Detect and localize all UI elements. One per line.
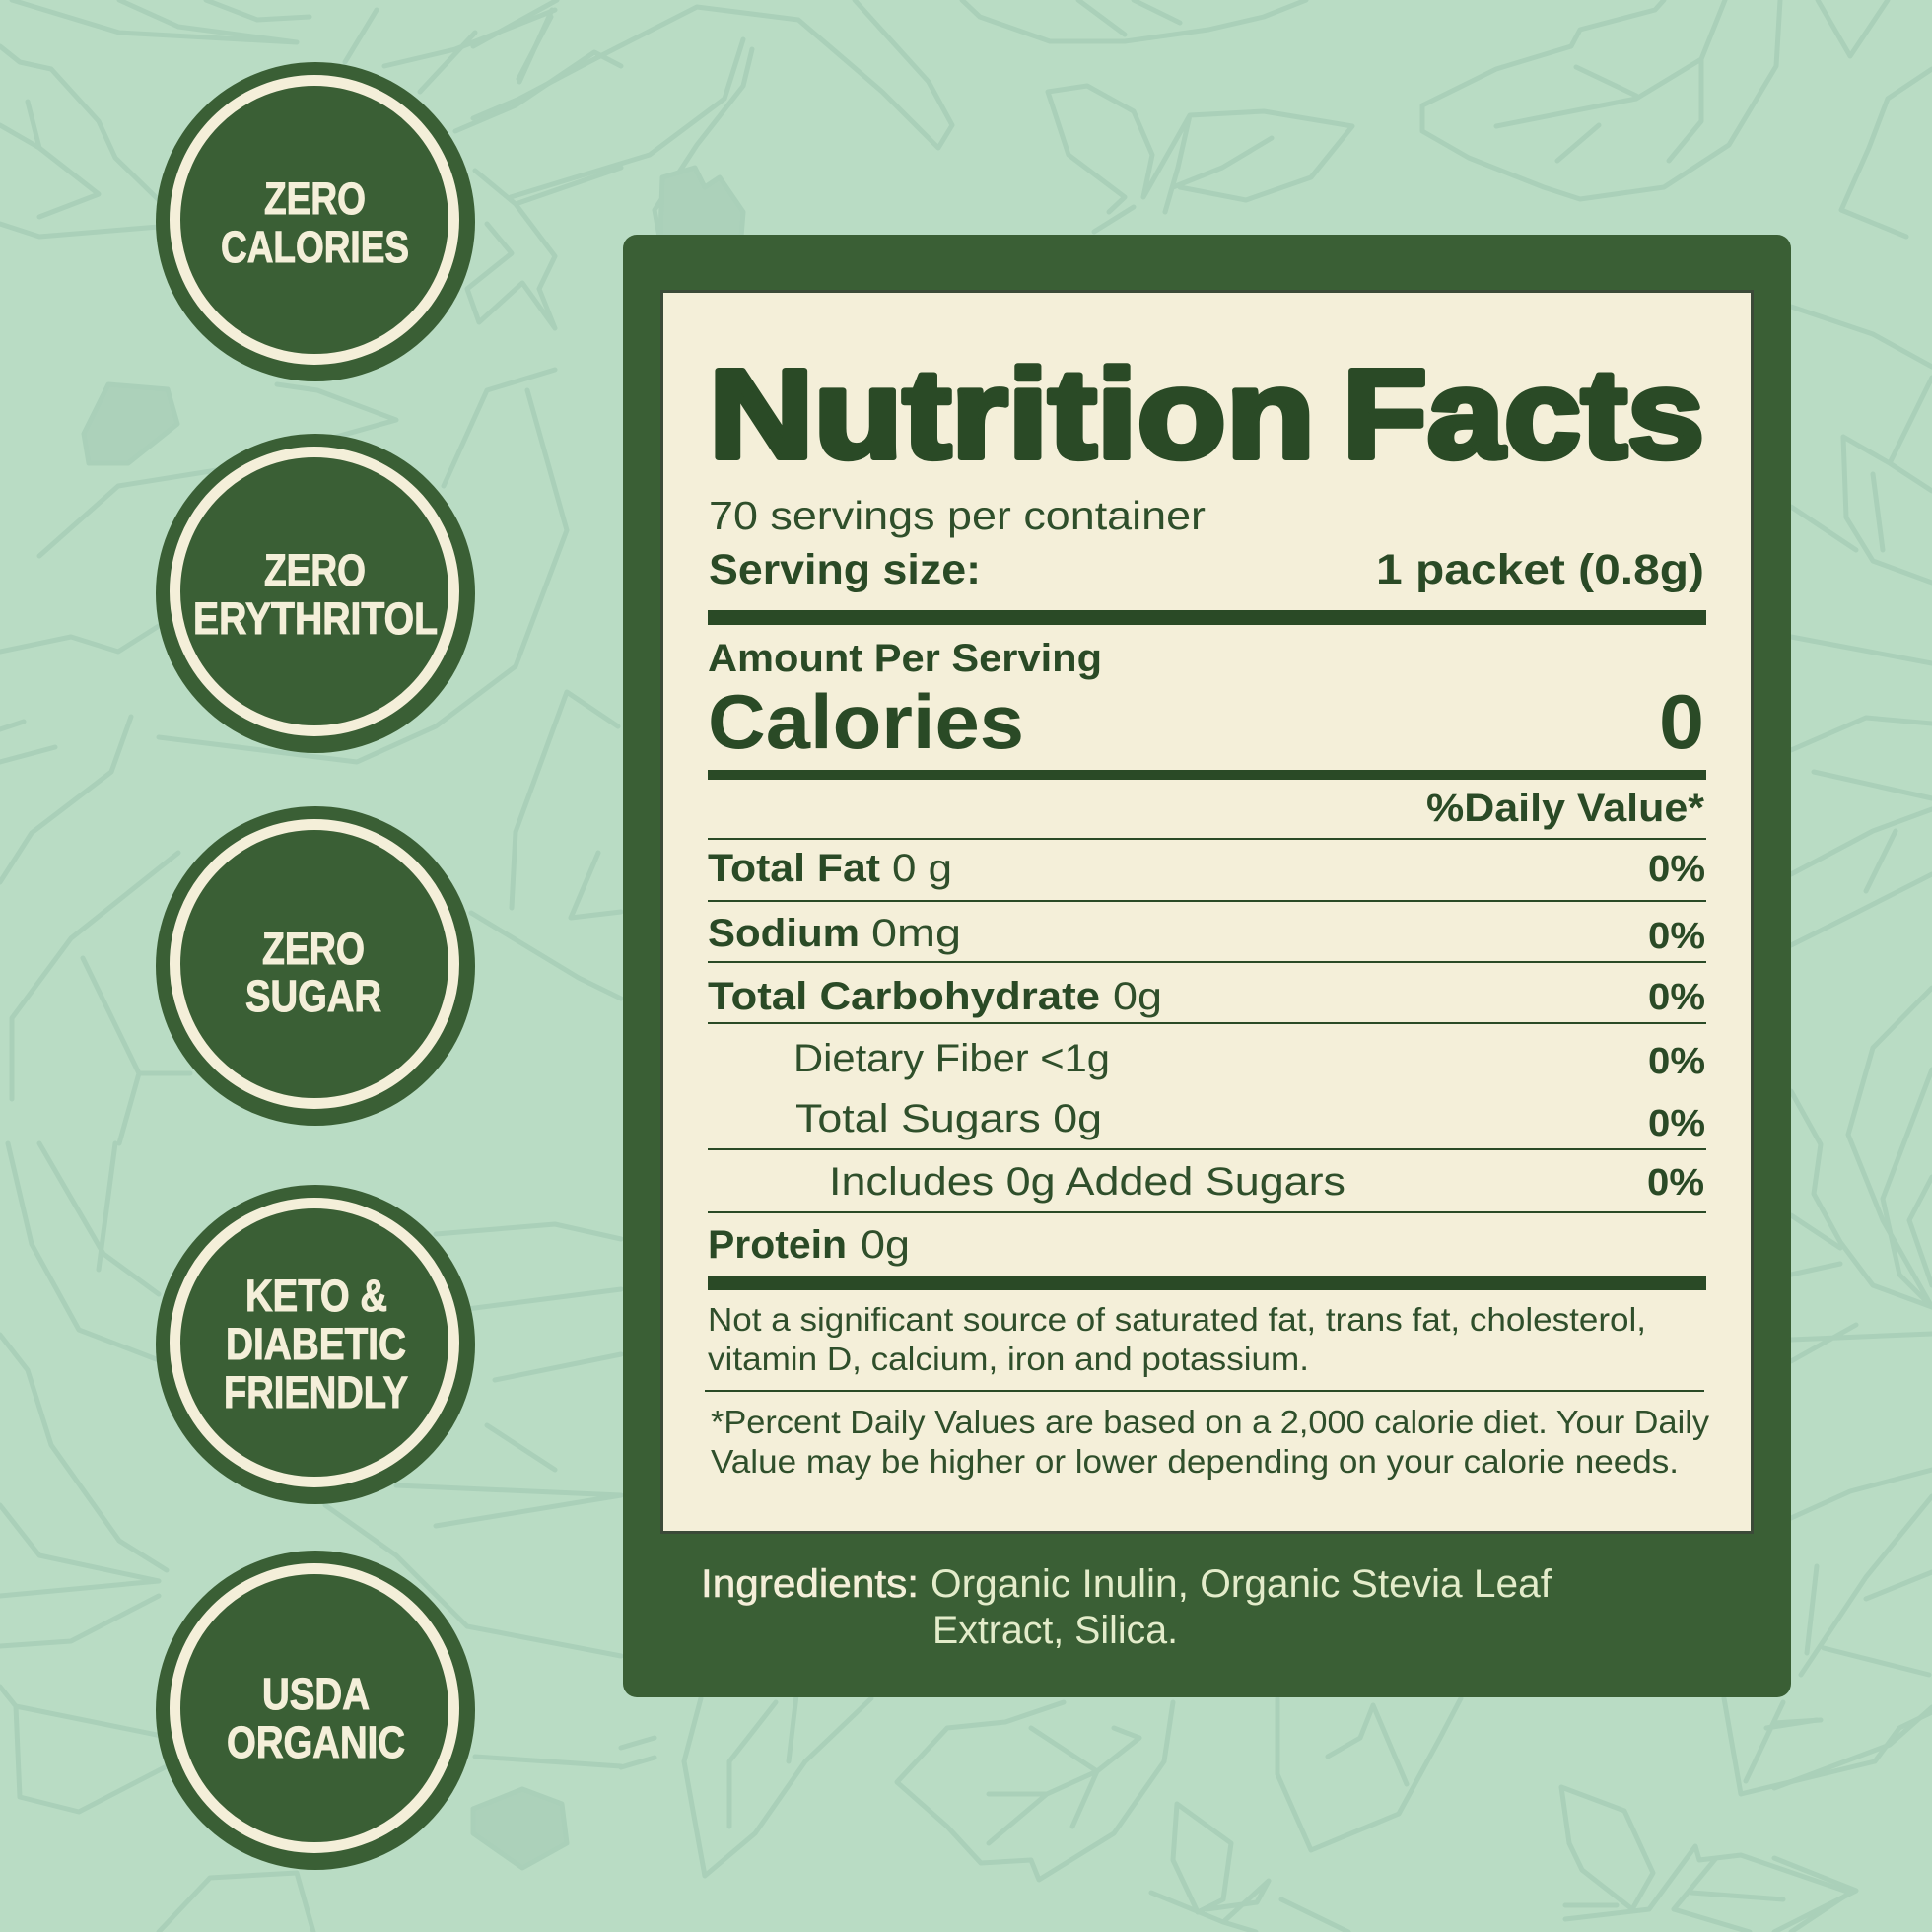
badge: zero sugar: SUGAR: [245, 971, 381, 1021]
row: total fat: 0 g: [892, 847, 952, 890]
title: Facts: [1343, 344, 1704, 485]
row: total sugars: [795, 1097, 1705, 1144]
badge: usda organic: USDA: [262, 1669, 370, 1719]
badge: zero calories: ZERO: [264, 173, 366, 224]
badge: keto and diabetic friendly: KETO &: [245, 1271, 387, 1321]
ingredients: [701, 1562, 1552, 1652]
row: dietary fiber: 0%: [1648, 1041, 1705, 1082]
row: total fat: 0%: [1648, 849, 1705, 890]
row: total sugars: Total Sugars 0g: [795, 1097, 1102, 1140]
badge: usda organic: [156, 1551, 475, 1870]
badge: keto and diabetic friendly: FRIENDLY: [224, 1367, 408, 1417]
badge: keto and diabetic friendly: [156, 1185, 475, 1504]
row: total fat: Total Fat: [708, 847, 880, 890]
row: total carbohydrate: Total Carbohydrate: [708, 975, 1100, 1018]
calories: 0: [1659, 678, 1704, 765]
row: total carbohydrate: [708, 975, 1705, 1018]
label card: [662, 292, 1753, 1532]
row: added sugars: [829, 1160, 1704, 1204]
note: not a significant source: vitamin D, calcium, iron and potassium.: [708, 1341, 1309, 1377]
badge: zero calories: [156, 62, 475, 381]
row: total fat: [708, 847, 1705, 890]
row: protein: Protein: [708, 1223, 847, 1267]
serving size: 1 packet (0.8g): [1376, 546, 1704, 593]
calories: Calories: [708, 678, 1024, 765]
ingredients: Organic Inulin, Organic Stevia Leaf: [931, 1562, 1552, 1606]
calories: [708, 678, 1704, 765]
serving size: Serving size:: [709, 546, 981, 593]
row: total sugars: 0%: [1648, 1103, 1705, 1144]
servings per container: 70 servings per container: [709, 493, 1206, 538]
note: not a significant source: Not a significant source of saturated fat, trans fat, cholesterol,: [708, 1301, 1646, 1338]
note: percent daily values: Value may be higher or lower depending on your calorie needs.: [711, 1443, 1679, 1480]
badge: keto and diabetic friendly: DIABETIC: [226, 1319, 406, 1369]
badge: zero calories: CALORIES: [221, 222, 409, 272]
row: sodium: Sodium: [708, 912, 860, 955]
title: [709, 344, 1704, 485]
note: percent daily values: *Percent Daily Values are based on a 2,000 calorie diet. Your Daily: [711, 1404, 1710, 1440]
badge: zero erythritol: ERYTHRITOL: [193, 593, 438, 644]
row: total carbohydrate: 0g: [1113, 975, 1162, 1018]
row: sodium: 0%: [1648, 916, 1705, 957]
ingredients: Ingredients:: [701, 1562, 919, 1606]
panel: nutrition label: [623, 235, 1791, 1697]
serving size: [709, 546, 1704, 593]
row: protein: 0g: [861, 1223, 910, 1267]
row: sodium: [708, 912, 1705, 957]
badge: zero erythritol: [156, 434, 475, 753]
note: percent daily values: [711, 1404, 1710, 1480]
ingredients: Extract, Silica.: [932, 1609, 1178, 1652]
badge: usda organic: ORGANIC: [227, 1717, 405, 1767]
daily value heading: %Daily Value*: [1426, 787, 1704, 830]
badge: zero sugar: [156, 806, 475, 1126]
row: protein: [708, 1223, 910, 1267]
badge: zero erythritol: ZERO: [264, 545, 366, 595]
row: total carbohydrate: 0%: [1648, 977, 1705, 1018]
amount per serving: Amount Per Serving: [708, 637, 1102, 680]
row: dietary fiber: Dietary Fiber <1g: [794, 1037, 1110, 1080]
note: not a significant source: [708, 1301, 1646, 1377]
row: dietary fiber: [794, 1037, 1705, 1082]
title: Nutrition: [709, 344, 1315, 485]
row: sodium: 0mg: [871, 912, 961, 955]
badge: zero sugar: ZERO: [262, 924, 365, 974]
row: added sugars: Includes 0g Added Sugars: [829, 1160, 1346, 1204]
row: added sugars: 0%: [1647, 1162, 1704, 1204]
